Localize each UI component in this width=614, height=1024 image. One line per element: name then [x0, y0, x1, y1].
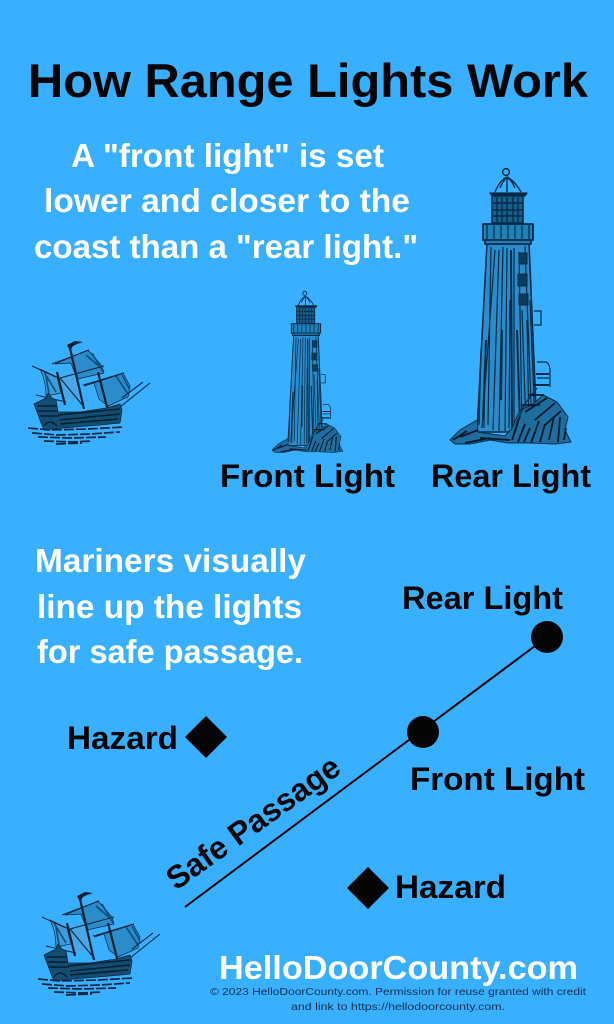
- explanation text block: line up the lights: [37, 588, 302, 625]
- icon: rear lighthouse: [450, 169, 571, 444]
- intro text block: A "front light" is set: [71, 137, 384, 174]
- intro text block: lower and closer to the: [44, 182, 410, 219]
- label: rear light: Rear Light: [431, 458, 591, 494]
- safe passage line: [185, 637, 547, 907]
- marker: hazard left: [185, 716, 227, 758]
- explanation text block: Mariners visually: [35, 542, 307, 579]
- title: How Range Lights Work: [28, 54, 589, 107]
- icon: upper ship: [28, 341, 150, 444]
- copyright note: © 2023 HelloDoorCounty.com. Permission for reuse granted with credit: [210, 986, 586, 998]
- copyright note: [210, 986, 586, 1013]
- label: front light diagram: Front Light: [410, 761, 585, 797]
- copyright note: and link to https://hellodoorcounty.com.: [291, 1001, 505, 1013]
- explanation text block: for safe passage.: [37, 633, 303, 670]
- label: hazard left: Hazard: [67, 720, 178, 756]
- website name: HelloDoorCounty.com: [219, 949, 578, 986]
- marker: rear light: [531, 621, 563, 653]
- label: hazard lower: Hazard: [395, 869, 506, 905]
- label: rear light diagram: Rear Light: [402, 580, 563, 616]
- intro text block: coast than a "rear light.": [34, 228, 418, 265]
- icon: lower ship: [38, 892, 160, 995]
- icon: front lighthouse: [272, 291, 343, 452]
- marker: hazard lower: [347, 867, 389, 909]
- label: safe passage: Safe Passage: [159, 748, 347, 897]
- explanation text block: [35, 542, 307, 670]
- label: front light: Front Light: [220, 458, 395, 494]
- intro text block: [34, 137, 418, 265]
- marker: front light: [407, 716, 439, 748]
